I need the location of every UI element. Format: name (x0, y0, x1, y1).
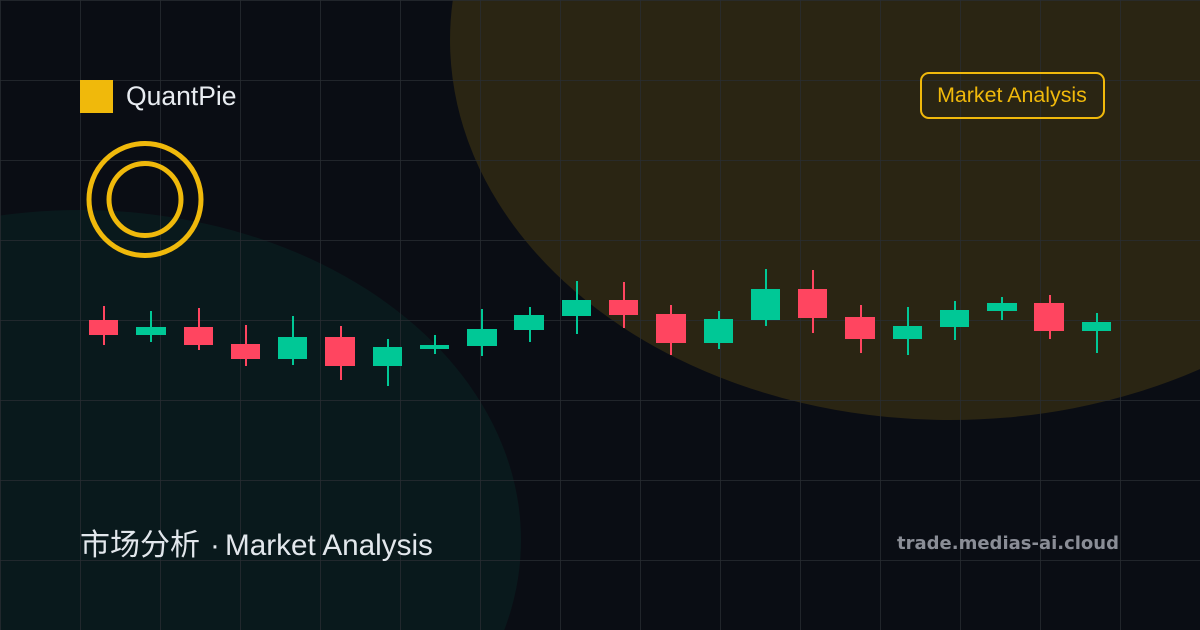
title: · (210, 529, 220, 562)
badge: Market Analysis (921, 73, 1104, 118)
candlestick chart (89, 269, 1111, 386)
icon: concentric gold rings (89, 144, 201, 256)
brand name: QuantPie (126, 81, 236, 111)
red candles (89, 270, 1064, 380)
badge: Market Analysis: Market Analysis (937, 83, 1087, 107)
url footer: trade.medias-ai.cloud (897, 533, 1119, 554)
green candles (136, 269, 1111, 386)
teal background ellipse (0, 210, 521, 630)
icon: logo square (80, 80, 113, 113)
title: Market Analysis (225, 529, 433, 562)
title: 市场分析 (80, 529, 200, 562)
logo: brand mark and name (80, 80, 236, 113)
gold background ellipse (450, 0, 1200, 420)
